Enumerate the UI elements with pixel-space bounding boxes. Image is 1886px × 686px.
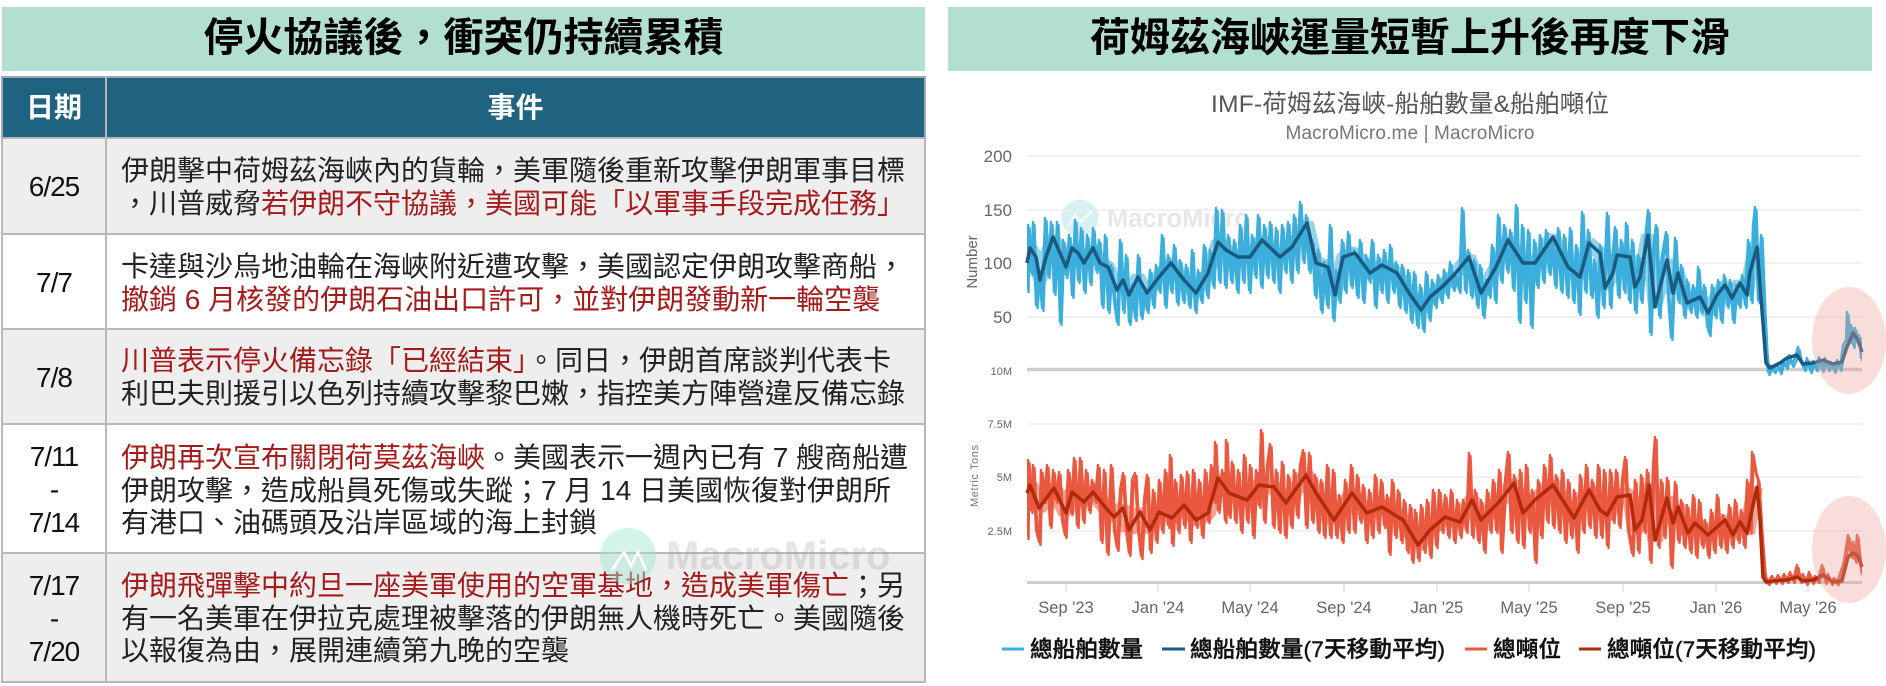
header: event: 事件 [487,92,544,123]
watermark: MacroMicro over table [600,528,890,584]
lower y axis labels: 2.5M [988,526,1012,538]
date 7/17-7/20: - [50,603,58,634]
date 7/17-7/20: 7/17 [29,570,79,601]
upper y axis labels: 100 [984,254,1012,273]
x axis labels: May '24 [1221,599,1279,617]
x axis labels [1038,599,1837,617]
event text 7/11-7/14: 有港口、油碼頭及沿岸區域的海上封鎖 [121,507,597,538]
event text 7/17-7/20: 伊朗飛彈擊中約旦一座美軍使用的空軍基地，造成美軍傷亡；另 [121,570,905,601]
date 7/11-7/14: 7/11 [30,441,78,472]
panel: events table [1,76,926,684]
chart title: IMF-荷姆茲海峽-船舶數量&船舶噸位 [1211,90,1609,118]
highlight: lower pink ellipse [1812,496,1886,603]
header: date: 日期 [26,92,82,123]
x axis labels: Sep '23 [1038,599,1094,617]
upper y axis labels: 200 [984,147,1012,166]
x axis labels: Sep '24 [1316,599,1372,617]
watermark: MacroMicro in chart: MacroMicro [1107,205,1250,233]
table row 7/17-7/20 [1,552,926,683]
x axis labels: May '26 [1779,599,1837,617]
event text 7/17-7/20: 以報復為由，展開連續第九晚的空襲 [121,635,569,666]
date 7/11-7/14: 7/14 [29,507,79,538]
event text 7/7: 撤銷 6 月核發的伊朗石油出口許可，並對伊朗發動新一輪空襲 [121,284,880,314]
lower y axis title: Metric Tons [969,444,981,507]
series: total tonnage 7-day MA [1027,475,1862,582]
upper y axis title: Number [964,235,981,289]
lower y axis labels [988,419,1012,538]
event text 7/11-7/14 [121,442,908,538]
event text 6/25: ，川普威脅若伊朗不守協議，美國可能「以軍事手段完成任務」 [121,188,905,218]
event text 7/8 [121,345,905,408]
legend item: total tonnage MA: 總噸位(7天移動平均) [1607,637,1816,662]
heading: left banner: 停火協議後，衝突仍持續累積 [204,16,724,60]
legend item: total ships: 總船舶數量 [1030,637,1143,662]
x axis ticks [1066,584,1808,592]
event text 7/7: 卡達與沙烏地油輪在海峽附近遭攻擊，美國認定伊朗攻擊商船， [121,251,905,282]
event text 7/8: 川普表示停火備忘錄「已經結束」。同日，伊朗首席談判代表卡 [121,345,891,376]
date 7/11-7/14 [29,441,80,538]
upper y axis labels [984,147,1012,378]
heading: right banner [948,7,1872,71]
series: total ships 7-day MA [1027,223,1862,368]
x axis labels: May '25 [1500,599,1558,617]
table header row [1,76,926,139]
table row 7/11-7/14 [1,423,926,554]
x axis labels: Sep '25 [1595,599,1651,617]
legend [1002,637,1816,662]
event text 7/11-7/14: 伊朗再次宣布關閉荷莫茲海峽。美國表示一週內已有 7 艘商船遭 [121,442,908,473]
upper y axis labels: 50 [993,308,1012,327]
upper y axis labels: 150 [984,201,1012,220]
x axis labels: Jan '25 [1411,599,1463,617]
table row 6/25 [1,137,926,235]
x axis labels: Jan '26 [1690,599,1742,617]
event text 6/25: 伊朗擊中荷姆茲海峽內的貨輪，美軍隨後重新攻擊伊朗軍事目標 [121,155,905,186]
x axis labels: Jan '24 [1132,599,1184,617]
date 7/8: 7/8 [36,362,72,393]
lower y axis labels: 5M [997,472,1012,484]
upper chart: ship count [964,147,1864,378]
event text 6/25 [121,155,905,218]
event text 7/8: 利巴夫則援引以色列持續攻擊黎巴嫩，指控美方陣營違反備忘錄 [121,378,905,408]
highlight: upper pink ellipse [1812,287,1886,394]
upper y axis labels: 10M [991,366,1012,378]
event text 7/7 [121,251,905,314]
event text 7/17-7/20 [121,570,905,666]
event text 7/17-7/20: 有一名美軍在伊拉克處理被擊落的伊朗無人機時死亡。美國隨後 [121,602,905,634]
table row 7/7 [1,233,926,330]
table row 7/8 [1,328,926,425]
date 6/25: 6/25 [29,171,79,202]
heading: left banner [2,7,925,71]
series: total ships [1027,202,1864,375]
legend item: total ships MA: 總船舶數量(7天移動平均) [1190,637,1445,662]
watermark: MacroMicro over table: MacroMicro [666,534,890,578]
watermark: MacroMicro in chart [1062,200,1250,236]
panel: chart [966,91,1886,662]
series: total tonnage [1027,430,1864,585]
date 7/17-7/20 [29,570,80,667]
date 7/17-7/20: 7/20 [29,636,79,667]
date 7/7: 7/7 [36,267,72,298]
date 7/11-7/14: - [50,474,58,505]
lower y axis labels: 7.5M [988,419,1012,431]
lower chart: tonnage [969,419,1864,617]
legend item: total tonnage: 總噸位 [1493,637,1561,662]
event text 7/11-7/14: 伊朗攻擊，造成船員死傷或失蹤；7 月 14 日美國恢復對伊朗所 [121,474,891,506]
chart subtitle: MacroMicro.me | MacroMicro [1286,123,1534,144]
heading: right banner: 荷姆茲海峽運量短暫上升後再度下滑 [1090,16,1730,60]
